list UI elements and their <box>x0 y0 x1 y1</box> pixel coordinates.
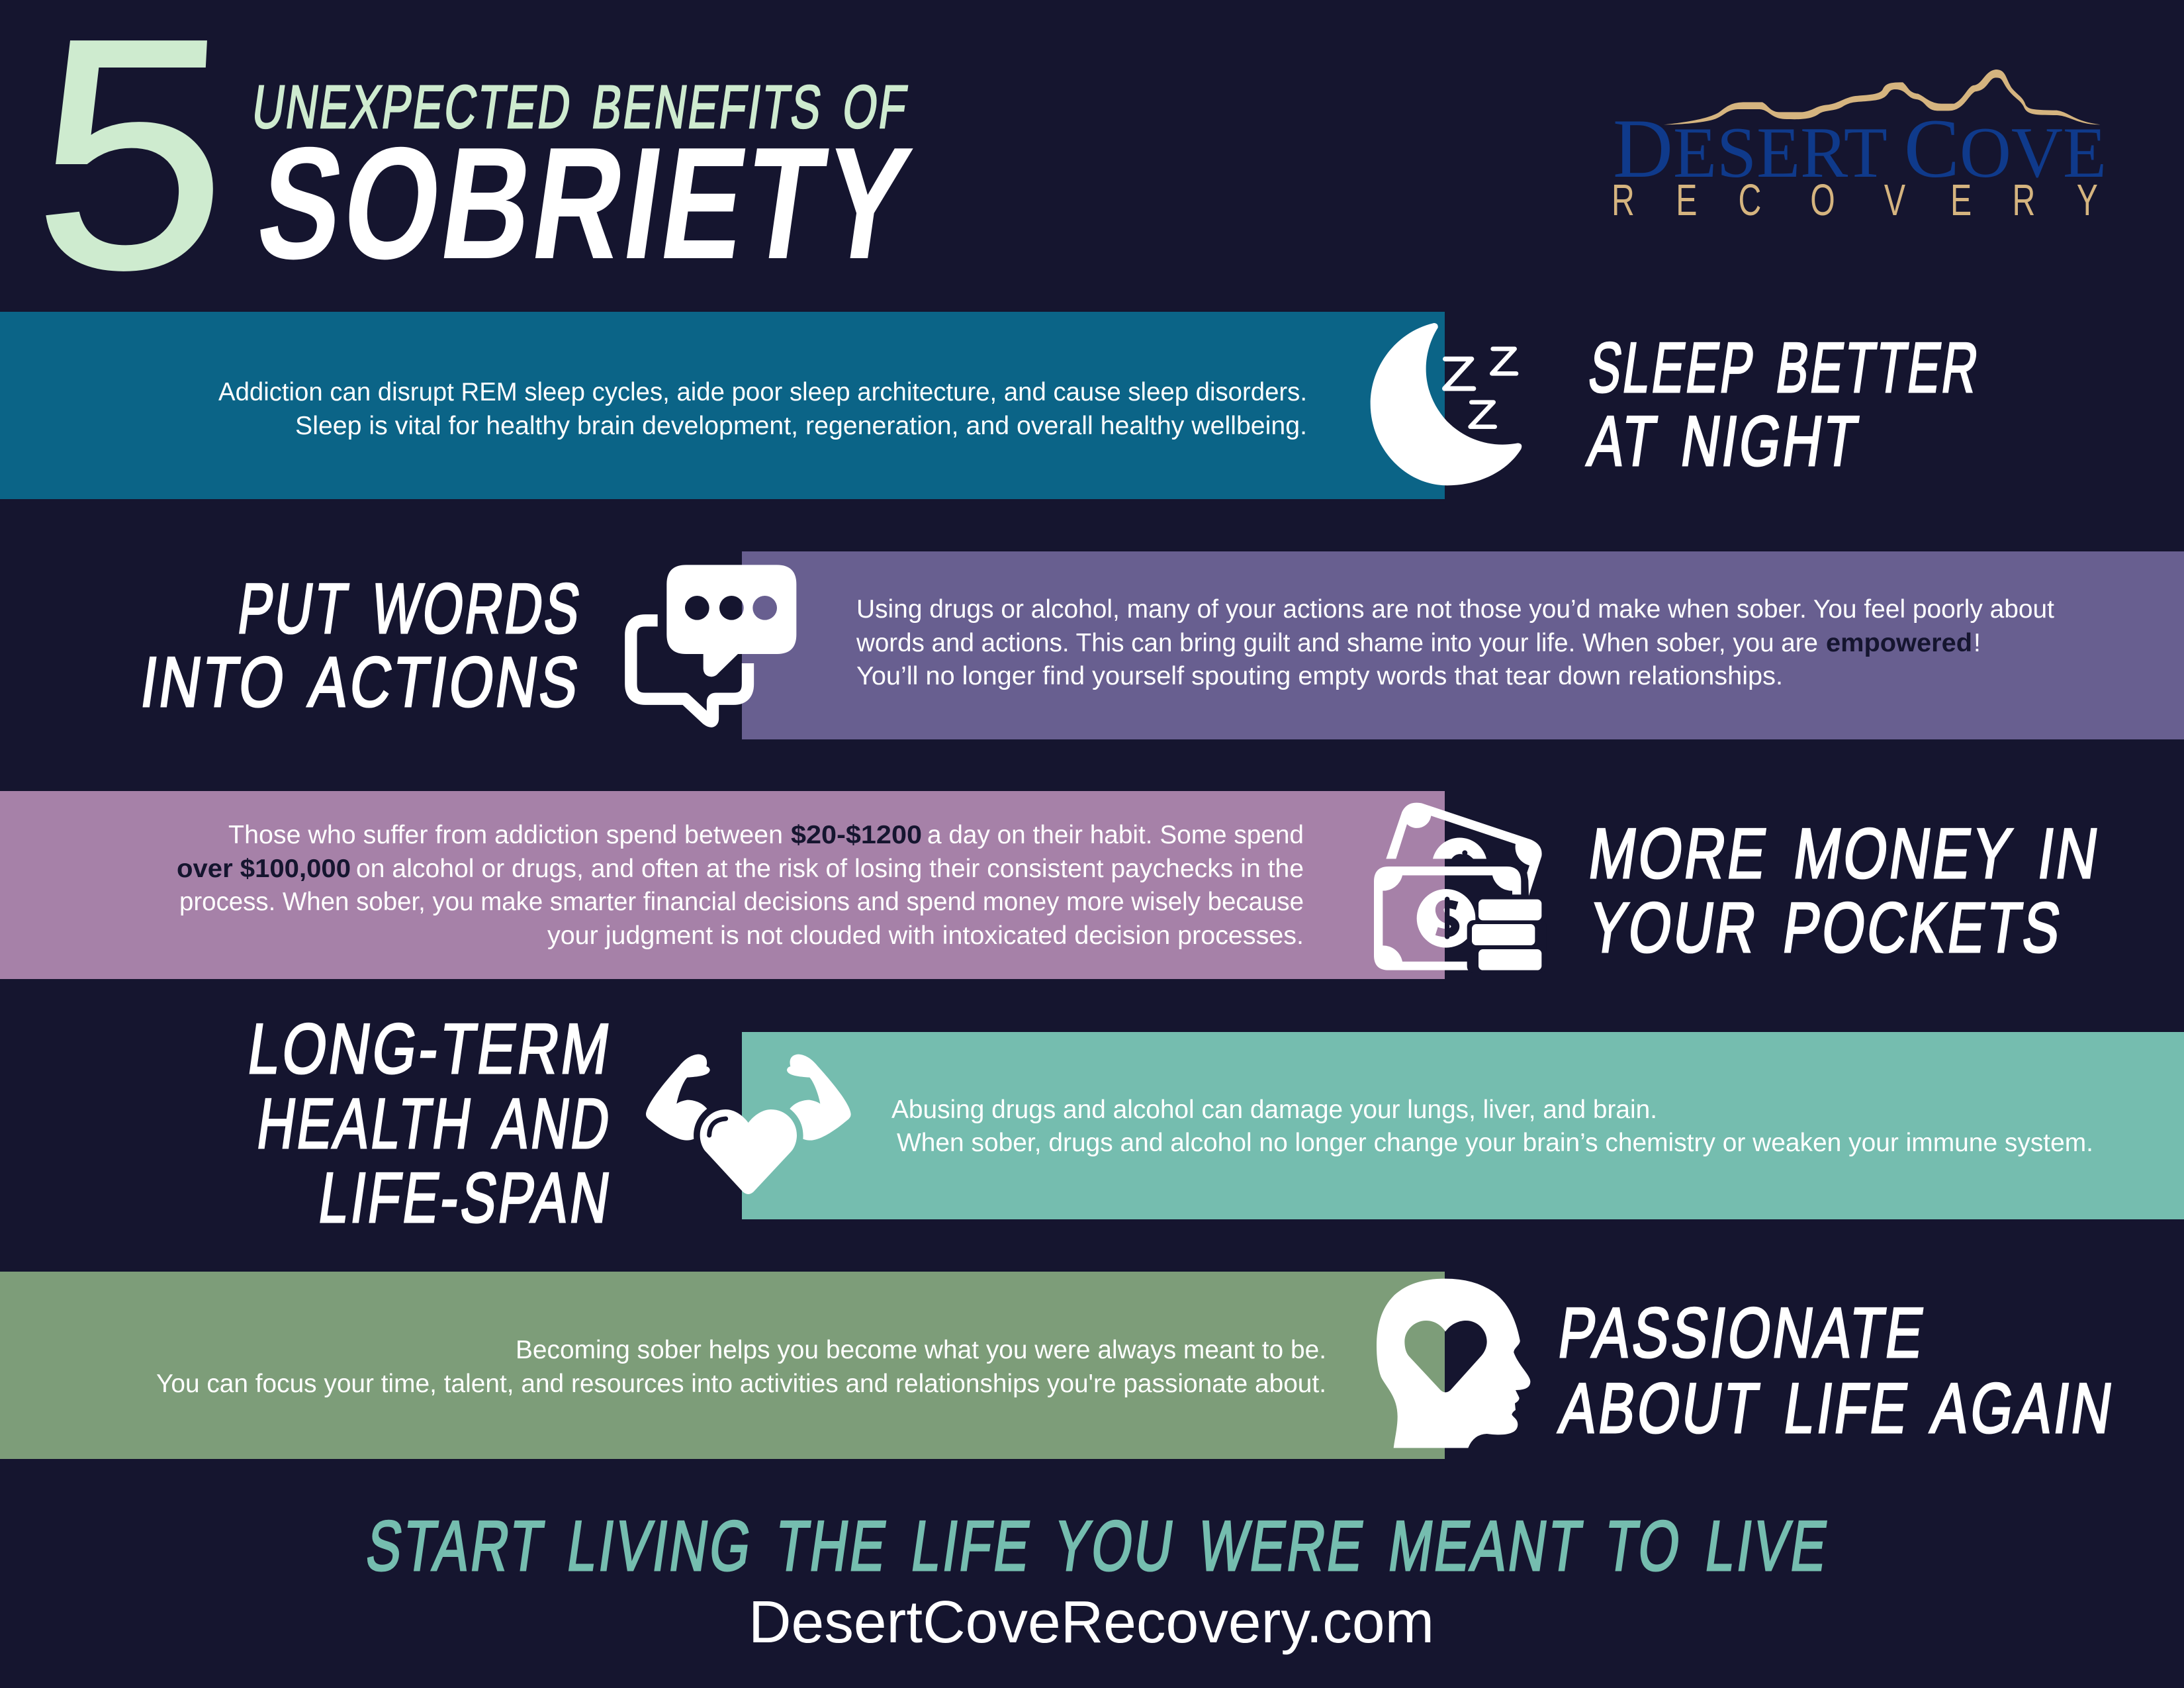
words text: You’ll no longer find yourself spouting empty words that tear down relationships. <box>856 662 1783 690</box>
words text: empowered <box>1826 629 1972 657</box>
subtitle: unexpected benefits of: UNEXPECTED BENEFITS OF <box>248 72 913 141</box>
logo mountain ridge <box>1664 70 2101 124</box>
heading: sleep better at night <box>1584 328 1985 481</box>
passion bar <box>0 1272 1445 1459</box>
sleep text <box>218 378 1307 440</box>
footer website: DesertCoveRecovery.com <box>749 1589 1434 1656</box>
heading: more money in your pockets <box>1584 814 2106 967</box>
money text: your judgment is not clouded with intoxicated decision processes. <box>547 921 1304 950</box>
heading: long-term health and life-span <box>244 1009 617 1237</box>
money text <box>177 821 1304 950</box>
title: sobriety: SOBRIETY <box>248 115 923 293</box>
heading: sleep better at night: SLEEP BETTER <box>1584 328 1985 407</box>
panel: sleep better <box>0 312 1985 499</box>
health text: When sober, drugs and alcohol no longer change your brain’s chemistry or weaken your immune system. <box>897 1129 2093 1157</box>
health text: Abusing drugs and alcohol can damage your lungs, liver, and brain. <box>891 1096 1657 1124</box>
words text: words and actions. This can bring guilt and shame into your life. When sober, you are <box>856 629 1818 657</box>
money text: $20-$1200 <box>791 821 922 849</box>
words text: ! <box>1974 629 1981 657</box>
panel: long-term health <box>244 1009 2184 1237</box>
money text: process. When sober, you make smarter financial decisions and spend money more wisely because <box>179 888 1304 916</box>
money bar <box>0 791 1445 979</box>
heading: long-term health and life-span: HEALTH AND <box>253 1084 617 1163</box>
heading: long-term health and life-span: LIFE-SPAN <box>314 1158 617 1237</box>
panel: words into actions <box>136 551 2184 739</box>
logo wordmark: Recovery: RECOVERY <box>1612 175 2098 225</box>
health text <box>891 1096 2093 1157</box>
money text: a day on their habit. Some spend <box>927 821 1304 849</box>
sleep text: Addiction can disrupt REM sleep cycles, aide poor sleep architecture, and cause sleep disorders. <box>218 378 1307 406</box>
icon: heart with flexed arms <box>646 1055 851 1194</box>
heading: put words into actions <box>136 569 588 722</box>
icon: moon with z's <box>1371 323 1522 485</box>
icon: head with heart <box>1377 1279 1530 1448</box>
money text: on alcohol or drugs, and often at the risk of losing their consistent paychecks in the <box>356 855 1304 883</box>
words text <box>856 595 2054 690</box>
heading: put words into actions: PUT WORDS <box>234 569 588 648</box>
footer <box>362 1506 1835 1656</box>
icon: money and coins <box>1374 802 1542 970</box>
money text: over $100,000 <box>177 855 351 883</box>
logo wordmark: Desert Cove: DESERT COVE <box>1613 103 2107 195</box>
icon: speech bubbles <box>631 565 796 722</box>
panel: more money <box>0 788 2106 986</box>
heading: passionate about life again <box>1554 1293 2120 1448</box>
passion text: You can focus your time, talent, and resources into activities and relationships you're passionate about. <box>156 1370 1326 1398</box>
heading: passionate about life again: PASSIONATE <box>1554 1293 1931 1372</box>
passion text <box>156 1336 1326 1398</box>
words text: Using drugs or alcohol, many of your actions are not those you’d make when sober. You feel poorly about <box>856 595 2054 624</box>
panel: passionate about life <box>0 1272 2120 1459</box>
sleep text: Sleep is vital for healthy brain development, regeneration, and overall healthy wellbeing. <box>295 412 1307 440</box>
title block <box>27 0 923 336</box>
passion text: Becoming sober helps you become what you were always meant to be. <box>516 1336 1326 1364</box>
heading: long-term health and life-span: LONG-TERM <box>244 1009 617 1088</box>
heading: sleep better at night: AT NIGHT <box>1584 401 1865 481</box>
money text: Those who suffer from addiction spend between <box>228 821 783 849</box>
health bar <box>742 1032 2184 1219</box>
words bar <box>742 551 2184 739</box>
logo: Desert Cove Recovery <box>1612 70 2107 225</box>
heading: put words into actions: INTO ACTIONS <box>136 642 586 722</box>
sleep bar <box>0 312 1445 499</box>
